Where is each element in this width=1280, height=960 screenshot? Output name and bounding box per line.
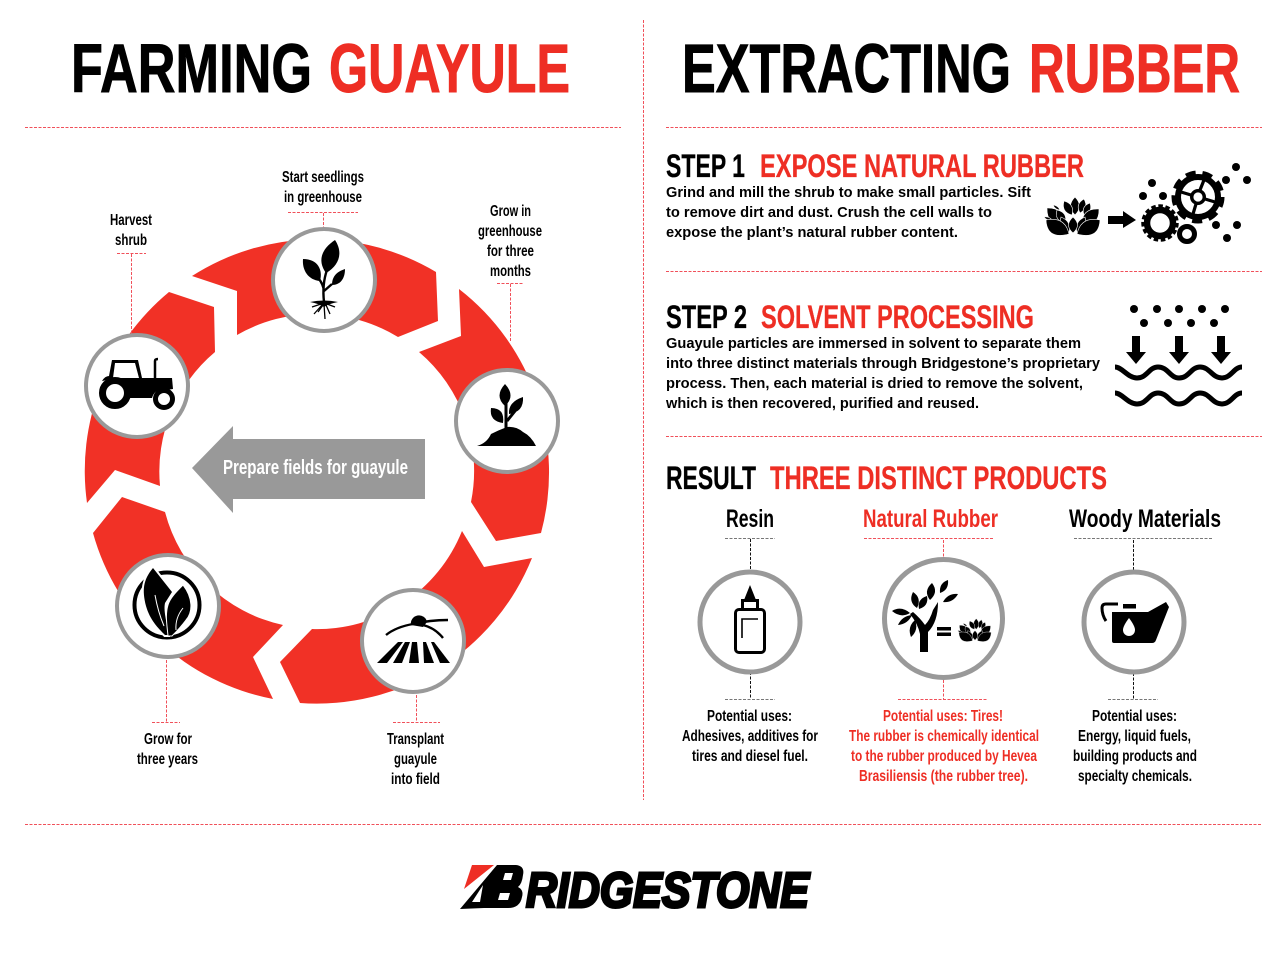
step 2 body text: into three distinct materials through Bridgestone’s proprietary — [666, 356, 1100, 372]
label: transplant guayule into field: Transplant — [387, 731, 444, 748]
title: farming guayule — [71, 30, 570, 107]
result heading: THREE DISTINCT PRODUCTS — [770, 460, 1107, 496]
step 2 body text — [665, 336, 1100, 412]
label: grow in greenhouse: Grow in — [490, 203, 531, 220]
title: extracting rubber: EXTRACTING — [682, 30, 1011, 107]
icon: seedling with roots — [273, 229, 375, 331]
icon: oil can — [1102, 602, 1169, 643]
step 1 heading: STEP 1 — [666, 148, 745, 184]
product: natural rubber — [849, 505, 1039, 785]
step 1 heading: EXPOSE NATURAL RUBBER — [760, 148, 1084, 184]
step 2 body text: which is then recovered, purified and reused. — [665, 396, 979, 412]
icon: leaves in ring — [117, 555, 219, 657]
icon: tree equals lotus — [892, 580, 991, 652]
step 1 body text — [666, 185, 1031, 241]
label: transplant guayule into field: into field — [391, 771, 440, 788]
step 1 body text: to remove dirt and dust. Crush the cell walls to — [666, 205, 992, 221]
arrow: prepare fields for guayule — [192, 426, 425, 513]
icon: plant to gears — [1044, 163, 1251, 242]
woody materials uses text: Potential uses: — [1092, 708, 1177, 725]
natural rubber uses text: to the rubber produced by Hevea — [851, 748, 1037, 765]
natural rubber uses text: Potential uses: Tires! — [883, 708, 1003, 725]
label: grow in greenhouse: months — [490, 263, 531, 280]
label: grow for three years — [137, 731, 198, 768]
label: grow in greenhouse: greenhouse — [478, 223, 542, 240]
label: grow for three years: Grow for — [144, 731, 192, 748]
resin uses text: Potential uses: — [707, 708, 792, 725]
title: farming guayule: GUAYULE — [329, 30, 570, 107]
step 1 body text: Grind and mill the shrub to make small particles. Sift — [666, 185, 1031, 201]
result heading: RESULT — [666, 460, 756, 496]
label: transplant guayule into field — [387, 731, 444, 788]
product: resin — [682, 505, 818, 765]
arrow: prepare fields for guayule: Prepare fields for guayule — [223, 457, 408, 479]
natural rubber uses text: The rubber is chemically identical — [849, 728, 1039, 745]
step 1 heading — [666, 148, 1084, 184]
label: transplant guayule into field: guayule — [394, 751, 437, 768]
woody materials uses text: Energy, liquid fuels, — [1078, 728, 1191, 745]
label: harvest shrub — [110, 212, 152, 249]
step 2 heading: SOLVENT PROCESSING — [761, 299, 1034, 335]
label: start seedlings: Start seedlings — [282, 169, 364, 186]
woody materials uses text — [1073, 708, 1197, 785]
icon: solvent drops and waves — [1115, 305, 1242, 404]
label: start seedlings — [282, 169, 364, 206]
icon: tractor — [86, 335, 188, 437]
title: farming guayule: FARMING — [71, 30, 312, 107]
label: grow for three years: three years — [137, 751, 198, 768]
icon: planted field — [362, 590, 464, 692]
product: woody materials: Woody Materials — [1069, 505, 1221, 533]
product: woody materials — [1069, 505, 1221, 785]
label: grow in greenhouse — [478, 203, 542, 280]
product: natural rubber: Natural Rubber — [863, 505, 998, 533]
ring: cycle arrow segments — [85, 239, 549, 704]
product: resin: Resin — [726, 505, 774, 533]
label: start seedlings: in greenhouse — [284, 189, 362, 206]
icon: sprout in soil — [456, 370, 558, 472]
step 2 heading — [666, 299, 1034, 335]
step 2 body text: Guayule particles are immersed in solvent to separate them — [666, 336, 1081, 352]
logo: bridgestone: RIDGESTONE — [526, 864, 810, 918]
natural rubber uses text — [849, 708, 1039, 785]
label: harvest shrub: shrub — [115, 232, 147, 249]
resin uses text — [682, 708, 818, 765]
natural rubber uses text: Brasiliensis (the rubber tree). — [859, 768, 1028, 785]
step 2 body text: process. Then, each material is dried to remove the solvent, — [666, 376, 1083, 392]
label: harvest shrub: Harvest — [110, 212, 152, 229]
icon: glue bottle — [736, 585, 764, 652]
resin uses text: Adhesives, additives for — [682, 728, 818, 745]
woody materials uses text: building products and — [1073, 748, 1197, 765]
label: grow in greenhouse: for three — [487, 243, 534, 260]
step 1 body text: expose the plant’s natural rubber content. — [666, 225, 958, 241]
step 2 heading: STEP 2 — [666, 299, 747, 335]
resin uses text: tires and diesel fuel. — [692, 748, 808, 765]
woody materials uses text: specialty chemicals. — [1078, 768, 1192, 785]
result heading — [666, 460, 1107, 496]
